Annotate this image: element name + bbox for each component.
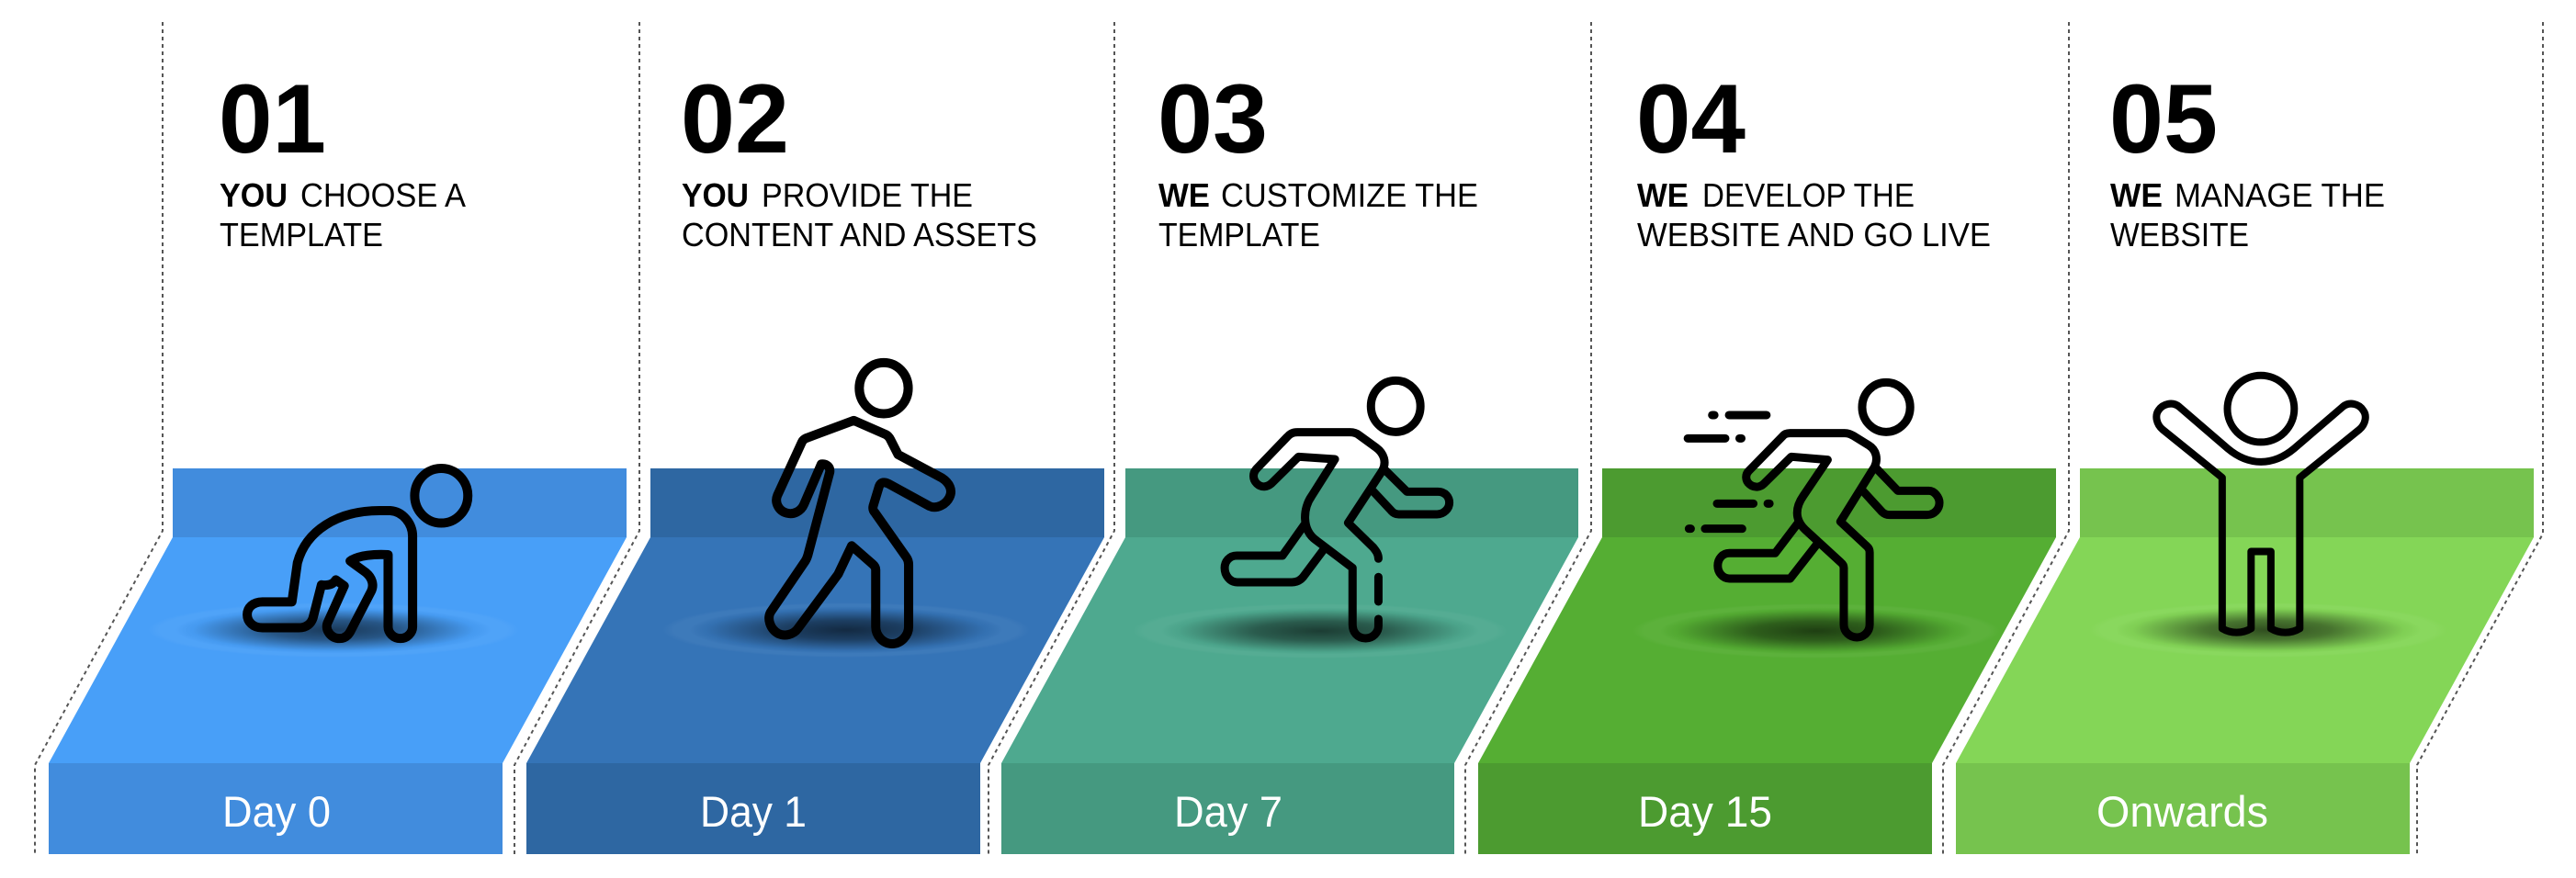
label: Day 0: Day 0 [222, 787, 331, 836]
label: Day 7: Day 7 [1174, 787, 1282, 836]
step description 05 [2110, 176, 2385, 253]
back wall [1602, 468, 2056, 537]
label: Day 1: Day 1 [700, 787, 807, 836]
front face [1478, 763, 1932, 854]
shadow [1133, 603, 1508, 658]
step description 04: WE [1637, 176, 1689, 214]
step description 01: TEMPLATE [220, 216, 383, 253]
floor [1956, 537, 2534, 763]
step number 02: 02 [681, 63, 789, 174]
step number 04: 04 [1636, 63, 1746, 174]
shadow [2089, 602, 2447, 658]
step description 05: WE [2110, 176, 2163, 214]
back wall [650, 468, 1104, 537]
step description 03: WE [1158, 176, 1210, 214]
front face [1001, 763, 1454, 854]
step description 03: CUSTOMIZE THE [1221, 176, 1478, 214]
step number 05: 05 [2109, 63, 2218, 174]
step description 04: WEBSITE AND GO LIVE [1637, 216, 1991, 253]
panel: step 04 [1465, 22, 2056, 854]
step description 01: CHOOSE A [300, 176, 466, 214]
shadow [148, 602, 519, 658]
step description 01: YOU [220, 176, 288, 214]
step description 04: DEVELOP THE [1702, 176, 1915, 214]
step description 03 [1158, 176, 1478, 253]
step number 01: 01 [219, 63, 326, 174]
icon: running person with speed lines [1688, 382, 1939, 637]
step description 03: TEMPLATE [1158, 216, 1320, 253]
icon: walking person [769, 363, 951, 644]
floor [1001, 537, 1578, 763]
icon: person with raised arms [2156, 376, 2366, 633]
back wall [173, 468, 627, 537]
step description 02: YOU [682, 176, 749, 214]
step description 02: PROVIDE THE [762, 176, 973, 214]
step description 02: CONTENT AND ASSETS [682, 216, 1037, 253]
floor [49, 537, 627, 763]
step description 01 [220, 176, 466, 253]
step description 02 [682, 176, 1037, 253]
label: Onwards: Onwards [2096, 787, 2268, 836]
step description 04 [1637, 176, 1991, 253]
step number 03: 03 [1158, 63, 1268, 174]
back wall [1125, 468, 1578, 537]
shadow [662, 602, 1030, 658]
floor [1478, 537, 2056, 763]
panel: step 05 [1943, 22, 2534, 854]
front face [1956, 763, 2410, 854]
front face [526, 763, 980, 854]
back wall [2080, 468, 2534, 537]
icon: jogging person [1225, 380, 1450, 638]
panel: step 03 [989, 22, 1578, 854]
panel: step 02 [514, 22, 1104, 854]
front face [49, 763, 503, 854]
shadow [1633, 603, 2000, 658]
label: Day 15: Day 15 [1638, 787, 1772, 836]
step description 05: WEBSITE [2110, 216, 2249, 253]
panel: step 01 [35, 22, 627, 854]
icon: crouching person [247, 468, 468, 638]
floor [526, 537, 1104, 763]
step description 05: MANAGE THE [2175, 176, 2385, 214]
